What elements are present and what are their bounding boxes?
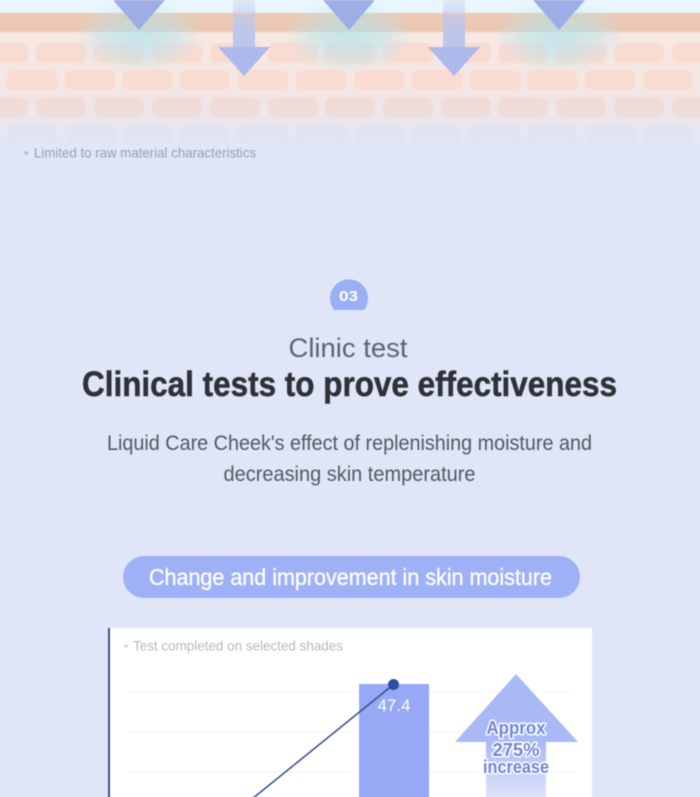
- footnote: raw material: Limited to raw material characteristics: [34, 144, 256, 160]
- description: [107, 432, 592, 486]
- arrow: short down 2: [323, 0, 375, 30]
- arrow: long down 2: [428, 0, 480, 76]
- section number badge: 03: [339, 288, 358, 305]
- up arrow: approx 275% increase: 275%: [492, 740, 540, 760]
- subheading: Clinic test: [288, 333, 408, 363]
- trend line: [247, 679, 399, 797]
- skin diagram: [0, 0, 700, 150]
- arrow: short down 1: [113, 0, 165, 30]
- chart panel: [108, 628, 592, 797]
- chart note: Test completed on selected shades: [133, 638, 343, 654]
- description: decreasing skin temperature: [224, 463, 476, 486]
- up arrow: approx 275% increase: [455, 674, 578, 797]
- bar: 47.4: 47.4: [378, 696, 410, 715]
- arrow: long down 1: [218, 0, 270, 76]
- up arrow: approx 275% increase: increase: [483, 757, 549, 777]
- pill heading: [123, 556, 580, 598]
- section number badge: [330, 279, 368, 310]
- pill heading: Change and improvement in skin moisture: [149, 564, 552, 590]
- up arrow: approx 275% increase: Approx: [486, 718, 546, 738]
- bar: 47.4: [359, 684, 429, 797]
- main heading: Clinical tests to prove effectiveness: [82, 365, 617, 404]
- arrow: short down 3: [533, 0, 585, 30]
- description: Liquid Care Cheek's effect of replenishing moisture and: [107, 432, 592, 455]
